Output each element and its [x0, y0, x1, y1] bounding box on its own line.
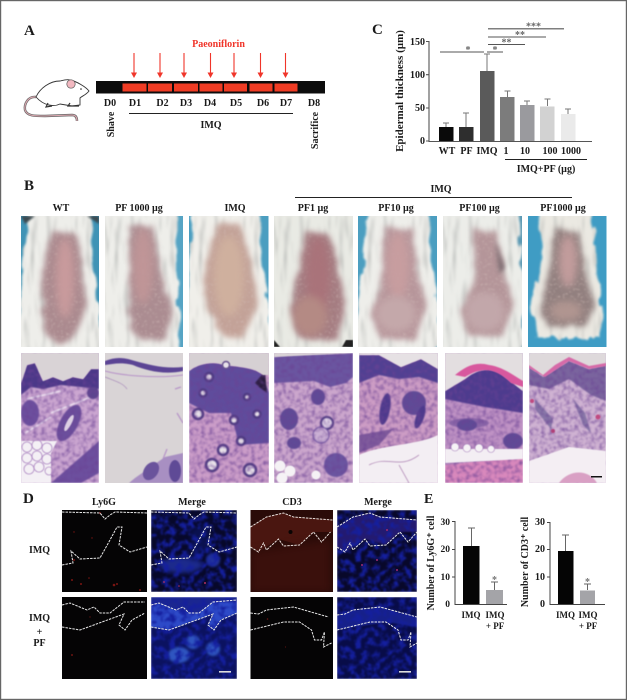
histology: IMQ	[189, 353, 269, 483]
significance brackets: **	[515, 30, 525, 41]
Sacrifice label: Sacrifice	[310, 111, 321, 149]
significance brackets: **	[502, 38, 512, 48]
y axis ticks: 150	[410, 37, 425, 48]
day labels: D0	[104, 98, 116, 109]
y axis ticks	[410, 37, 425, 147]
row label IMQ + PF: IMQ	[29, 613, 50, 624]
Shave label: Shave	[106, 111, 117, 137]
x axis labels	[439, 146, 581, 157]
micrograph: Ly6G IMQ	[62, 510, 147, 592]
panel letter E: E	[424, 492, 433, 507]
panel letter A: A	[24, 23, 35, 39]
scale bar	[591, 476, 602, 478]
row label IMQ + PF: +	[37, 627, 43, 638]
row label IMQ: IMQ	[29, 545, 50, 556]
micrograph: CD3 IMQ	[250, 510, 333, 592]
significance brackets: ***	[526, 22, 541, 32]
column headings	[92, 497, 392, 508]
timeline bar	[96, 81, 325, 94]
axes	[547, 522, 605, 604]
day labels: D8	[308, 98, 320, 109]
x labels: IMQ	[556, 610, 575, 620]
photo: WT	[21, 216, 99, 347]
bars	[468, 528, 498, 590]
significance star: *	[492, 575, 497, 586]
column headings: Merge	[364, 497, 392, 508]
axes	[426, 41, 592, 142]
scale bar	[399, 671, 411, 673]
x labels: IMQ	[578, 610, 598, 620]
y axis ticks	[535, 517, 545, 610]
y axis ticks: 30	[440, 518, 450, 528]
x axis labels: IMQ	[476, 146, 498, 157]
chart: CD3+ cell count	[520, 517, 605, 631]
panel letter D: D	[23, 491, 34, 507]
panel C: epidermal thickness chart	[372, 22, 592, 175]
bars	[562, 535, 591, 590]
IMQ period bracket: IMQ	[200, 120, 222, 131]
y axis ticks: 20	[535, 544, 545, 555]
y axis title: Number of Ly6G⁺ cell	[426, 515, 437, 610]
y axis ticks: 0	[540, 599, 545, 610]
x axis labels: PF	[460, 146, 473, 157]
column headings: PF100 µg	[459, 203, 500, 214]
day labels: D3	[180, 98, 192, 109]
photo: IMQ	[189, 216, 268, 347]
micrograph: Ly6G IMQ+PF	[62, 597, 147, 679]
photo: PF10 µg	[358, 216, 437, 347]
micrograph: CD3 merge IMQ	[337, 510, 417, 592]
x axis labels: 10	[520, 146, 530, 157]
x labels	[556, 610, 598, 631]
y axis ticks: 50	[415, 103, 425, 114]
column headings: Ly6G	[92, 497, 116, 508]
column headings: CD3	[282, 497, 302, 508]
photo: PF1000 µg	[528, 216, 606, 347]
day labels	[104, 98, 320, 109]
micrograph: CD3 merge IMQ+PF	[337, 597, 417, 679]
x labels: IMQ	[486, 610, 504, 620]
x axis labels: 100	[542, 146, 558, 157]
histology: PF10 µg	[359, 353, 438, 483]
significance brackets: *	[492, 45, 498, 56]
axes	[452, 521, 507, 604]
y axis ticks: 10	[440, 573, 450, 583]
y axis ticks: 10	[535, 572, 545, 583]
y axis ticks: 0	[420, 136, 425, 147]
arrows: daily paeoniflorin doses	[131, 53, 288, 78]
Paeoniflorin label: Paeoniflorin	[192, 39, 245, 50]
panel B: skin photos and histology	[15, 178, 606, 484]
x labels: IMQ	[462, 610, 480, 620]
icon: mouse	[25, 80, 89, 121]
significance brackets	[440, 22, 564, 56]
y axis ticks: 20	[440, 545, 450, 555]
panel letter C: C	[372, 22, 383, 38]
significance star: *	[585, 577, 590, 588]
column headings: PF1 µg	[298, 203, 328, 214]
column headings: WT	[53, 203, 70, 214]
day labels: D4	[204, 98, 216, 109]
significance brackets: *	[466, 45, 470, 56]
photo: PF1 µg	[274, 216, 353, 347]
chart: Ly6G+ cell count	[426, 515, 507, 631]
x axis labels: WT	[439, 146, 456, 157]
day labels: D7	[280, 98, 292, 109]
row label IMQ + PF: PF	[33, 638, 46, 649]
panel E: cell count charts	[424, 492, 605, 631]
column headings: PF1000 µg	[540, 203, 586, 214]
photo: PF 1000 µg	[105, 216, 183, 347]
histology: PF 1000 µg	[105, 353, 183, 483]
column headings	[53, 203, 586, 214]
day labels: D1	[129, 98, 141, 109]
panel letter B: B	[24, 178, 34, 194]
histology: PF100 µg	[445, 353, 523, 483]
day labels: D6	[257, 98, 269, 109]
photo: PF100 µg	[443, 216, 522, 347]
IMQ group header: IMQ	[430, 184, 452, 195]
histology: WT	[21, 353, 99, 483]
column headings: PF10 µg	[378, 203, 414, 214]
x labels: + PF	[486, 621, 505, 631]
IMQ+PF group label: IMQ+PF (µg)	[517, 164, 575, 175]
histology: PF1000 µg	[529, 353, 606, 483]
x labels	[462, 610, 505, 631]
column headings: PF 1000 µg	[115, 203, 163, 214]
micrograph: Ly6G merge IMQ	[151, 510, 237, 592]
IMQ+PF group label	[505, 159, 587, 175]
y axis ticks	[440, 518, 450, 610]
histology: PF1 µg	[274, 353, 353, 483]
y axis ticks: 0	[445, 600, 450, 610]
y axis ticks: 30	[535, 517, 545, 528]
day labels: D5	[230, 98, 242, 109]
x axis labels: 1000	[561, 146, 581, 157]
column headings: Merge	[178, 497, 206, 508]
panel D: immunofluorescence	[23, 491, 417, 679]
row label IMQ + PF	[29, 613, 50, 649]
day labels: D2	[156, 98, 169, 109]
micrograph: CD3 IMQ+PF	[250, 597, 333, 679]
x labels: + PF	[579, 621, 598, 631]
bars	[439, 54, 576, 141]
y axis ticks: 100	[410, 70, 425, 81]
y axis title: Epidermal thickness (µm)	[394, 30, 406, 152]
y axis title: Number of CD3⁺ cell	[520, 517, 531, 607]
column headings: IMQ	[224, 203, 246, 214]
panel A: treatment timeline	[24, 23, 325, 149]
scale bar	[219, 671, 231, 673]
x axis labels: 1	[504, 146, 508, 157]
micrograph: Ly6G merge IMQ+PF	[151, 597, 237, 679]
